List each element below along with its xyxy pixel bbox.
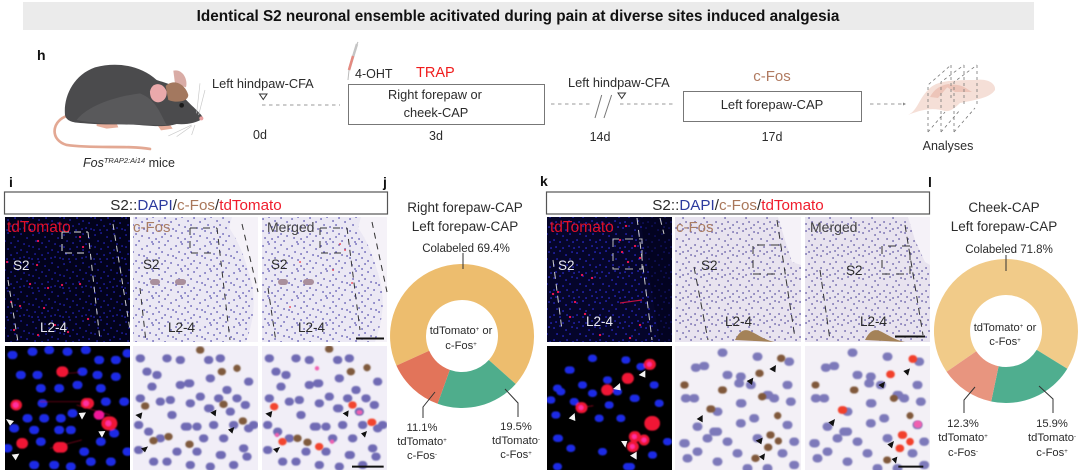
micrograph: tdTomato overview: tdTomato [7,219,71,236]
micrograph: merged zoomed cells [805,346,930,470]
mouse strain label: Fos [83,156,104,170]
label: 11.1% [397,392,447,462]
donut centre label: + [476,327,480,333]
micrograph: tdTomato overview [5,217,130,342]
step: 17d c-Fos: 17d [762,130,782,144]
label: 12.3%: + [984,434,988,440]
step: 3d TRAP: 3d [429,129,443,143]
donut centre label: or [479,325,493,337]
panel letter j: j [382,174,387,190]
donut heading: Right forepaw-CAP [407,200,523,215]
micrograph: merged overview: S2 [271,257,288,272]
label: 19.5% [492,389,540,461]
donut heading: Left forepaw-CAP [412,219,518,234]
label: 12.3% [938,387,988,459]
label: 19.5%: 19.5% [500,421,532,433]
label: colabeled 71.8% [965,244,1053,271]
label: 15.9%: tdTomato [1028,432,1074,444]
title banner [23,2,1034,30]
label: 11.1%: - [435,452,437,458]
step: 3d TRAP: Right forepaw or [388,87,483,102]
micrograph: merged overview: L2-4 [860,314,888,329]
panel letter h: h [37,47,46,63]
panel letter k: k [540,173,548,189]
donut: tdTomato negative c-Fos positive segment [438,360,516,408]
label: 19.5%: - [538,437,540,443]
micrograph: c-Fos overview: c-Fos [676,219,714,236]
micrograph: tdTomato overview: S2 [558,258,575,273]
micrograph: tdTomato overview: tdTomato [550,219,614,236]
donut: tdTomato positive c-Fos negative segment [947,351,999,402]
micrograph: tdTomato overview: L2-4 [40,320,68,335]
micrograph: tdTomato overview: S2 [13,258,30,273]
donut centre label: c-Fos [989,336,1017,348]
donut centre label: + [1020,324,1024,330]
micrograph: merged overview: Merged [810,219,857,235]
panel i: histology, S2 [4,174,388,470]
step: 3d TRAP: cheek-CAP [404,105,468,120]
step: 17d c-Fos [684,68,862,144]
label: 15.9%: + [1064,449,1068,455]
label: 15.9%: 15.9% [1036,418,1068,430]
mouse strain label: mice [145,156,175,170]
donut heading: Cheek-CAP [968,200,1040,215]
donut heading [951,200,1057,234]
micrograph: c-Fos overview: L2-4 [168,320,196,335]
micrograph: tdTomato zoomed cells [547,346,672,470]
donut centre label [974,322,1037,348]
donut heading: Left forepaw-CAP [951,219,1057,234]
stain legend header: S2::DAPI/c-Fos/tdTomato [110,197,282,214]
micrograph: tdTomato overview [547,217,672,342]
label: 12.3%: tdTomato [938,432,984,444]
label: 11.1%: c-Fos [407,450,435,462]
donut centre label: tdTomato [430,325,476,337]
donut centre label: c-Fos [445,340,473,352]
micrograph: merged overview: Merged [267,219,314,235]
label: 19.5%: tdTomato [492,435,538,447]
label: 19.5%: c-Fos [500,449,528,461]
micrograph: merged overview [805,217,930,342]
donut: colabeled segment [934,259,1078,372]
icon: syringe [348,42,358,80]
step: 14d CFA: 14d [590,130,610,144]
micrograph: c-Fos zoomed cells [133,346,258,470]
step: 3d TRAP [348,65,544,143]
label: colabeled 69.4% [422,243,510,269]
donut centre label: + [1017,338,1021,344]
micrograph: merged overview: L2-4 [298,320,326,335]
donut centre label: + [473,342,477,348]
micrograph: merged overview [262,217,387,342]
label: 12.3%: - [976,449,978,455]
label: colabeled 71.8%: Colabeled 71.8% [965,244,1053,256]
micrograph: c-Fos overview: S2 [143,257,160,272]
label: 19.5%: + [528,451,532,457]
micrograph: c-Fos overview [133,217,258,342]
label: colabeled 69.4%: Colabeled 69.4% [422,243,510,255]
step: 17d c-Fos: Left forepaw-CAP [721,97,823,112]
stain legend header [546,192,930,214]
analyses label: Analyses [923,139,973,153]
donut: tdTomato positive c-Fos negative segment [396,351,450,404]
label: 11.1%: + [443,438,447,444]
mouse strain label: TRAP2:Ai14 [104,156,145,165]
step: 3d TRAP: 4-OHT [355,67,393,81]
micrograph: c-Fos overview: S2 [701,258,718,273]
micrograph: merged overview: S2 [846,263,863,278]
micrograph: c-Fos overview: L2-4 [725,314,753,329]
micrograph: tdTomato zoomed cells [5,346,130,470]
step: 14d CFA [551,75,676,144]
panel k: histology, S2 [540,173,930,470]
label: 12.3%: 12.3% [947,418,979,430]
donut heading [407,200,523,234]
label: 15.9%: - [1074,434,1076,440]
panel l: donut chart [928,174,1078,459]
step: 3d TRAP: TRAP [416,65,455,81]
icon: mouse [55,65,205,149]
panel h: experimental timeline [37,42,995,170]
label: 15.9% [1028,386,1076,459]
step: 0d CFA [212,76,340,142]
panel letter i: i [9,174,13,190]
donut: tdTomato negative c-Fos positive segment [991,350,1067,403]
micrograph: c-Fos overview: c-Fos [133,219,170,236]
micrograph: c-Fos zoomed cells [675,346,801,470]
donut centre label: or [1023,322,1037,334]
panel j: donut chart [382,174,540,462]
micrograph: c-Fos overview [675,217,801,342]
arrow to analyses [870,102,906,106]
label: 11.1%: 11.1% [407,422,437,434]
step: 14d CFA: Left hindpaw-CFA [568,75,670,90]
title banner: Identical S2 neuronal ensemble acitivated during pain at diverse sites induced analgesia [197,8,840,25]
step: 0d CFA: Left hindpaw-CFA [212,76,314,91]
label: 12.3%: c-Fos [948,447,976,459]
micrograph: merged zoomed cells [262,346,387,470]
donut: colabeled segment [390,264,534,384]
icon: brain with section planes [908,65,995,132]
label: 15.9%: c-Fos [1036,447,1064,459]
step: 17d c-Fos: c-Fos [753,68,791,85]
stain legend header [4,192,388,214]
stain legend header: S2::DAPI/c-Fos/tdTomato [652,197,824,214]
donut centre label [430,325,493,352]
panel letter l: l [928,174,932,190]
micrograph: tdTomato overview: L2-4 [586,314,614,329]
step: 0d CFA: 0d [253,128,267,142]
donut centre label: tdTomato [974,322,1020,334]
label: 11.1%: tdTomato [397,436,443,448]
